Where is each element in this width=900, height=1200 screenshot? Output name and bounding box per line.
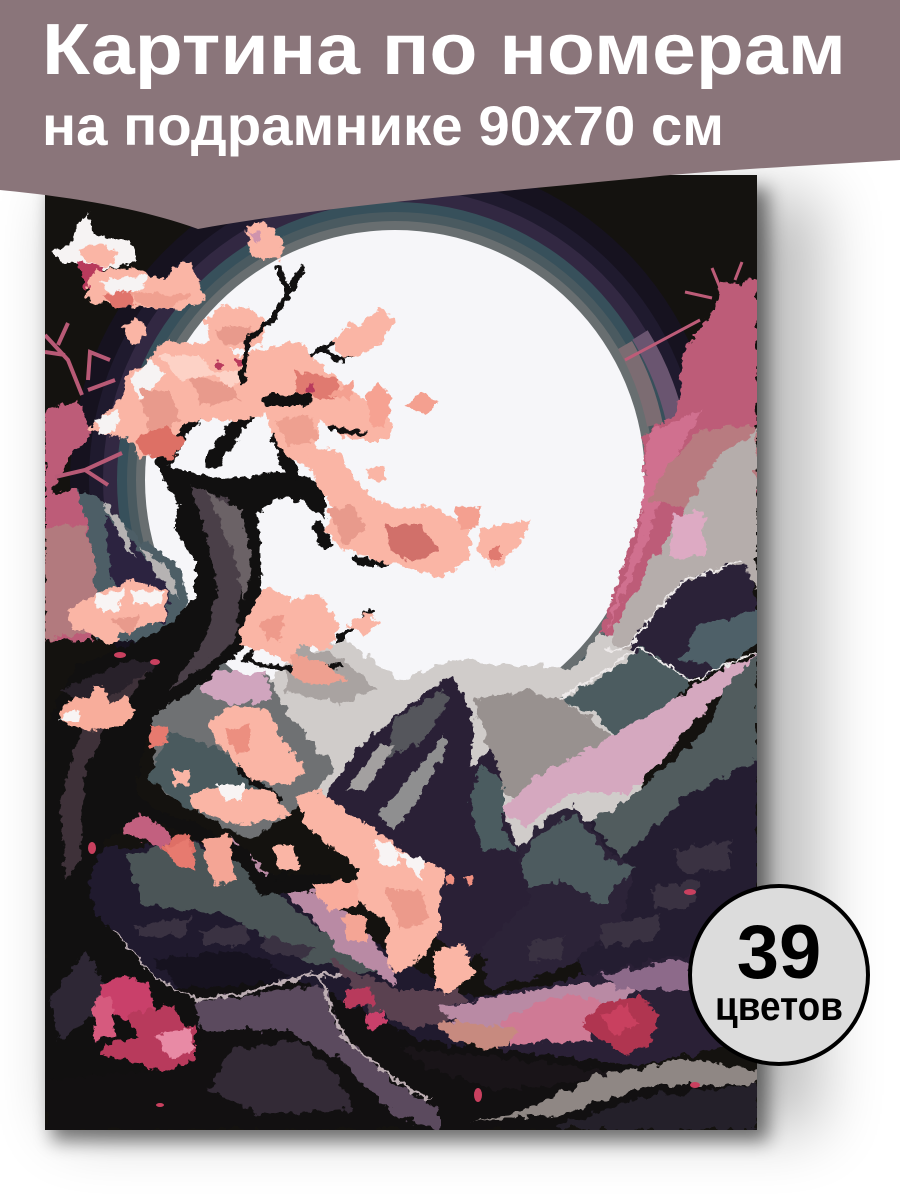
painting: halo around the moon (70, 188, 690, 673)
painting: valley floor (88, 812, 723, 1066)
subtitle: на подрамнике 90х70 см (42, 94, 724, 157)
painting: blossoms upper main cluster (88, 305, 392, 470)
painting: moon (145, 230, 645, 730)
painting: left mountain (78, 490, 190, 640)
painting: small falling petals (88, 652, 700, 1107)
painting: blossoms middle left (68, 580, 168, 645)
painting canvas (45, 155, 757, 1130)
painting: mist (145, 632, 640, 860)
painting: pink sky right (600, 278, 757, 640)
painting: pink sky left (45, 400, 98, 642)
painting: pink twigs left (45, 323, 122, 485)
banner background (0, 0, 900, 229)
painting: blossoms centre branch (148, 585, 380, 885)
painting: tree trunk and limbs (48, 465, 328, 1042)
painting: central mountain (322, 675, 530, 960)
painting: root highlights (112, 930, 430, 1100)
painting: large lotus blossom (58, 685, 135, 730)
badge: 39 colours (690, 886, 868, 1064)
painting: valley mottling (135, 840, 730, 962)
painting: foreground ground (45, 977, 757, 1130)
badge label: цветов (715, 983, 843, 1029)
painting: pink flower bushes (92, 975, 660, 1072)
painting: cloud and right ridges (470, 430, 757, 1000)
painting: upper branch over blossoms (242, 268, 365, 434)
canvas shadow (52, 188, 820, 1141)
title: Картина по номерам (42, 10, 846, 90)
painting: blossoms lower diagonal spray (295, 790, 475, 995)
painting: tree branches (154, 416, 390, 804)
badge number: 39 (737, 910, 821, 995)
painting: pink twigs right (625, 262, 742, 360)
painting: blossoms right spray on moon (330, 305, 438, 425)
painting: blossoms lower right spray (305, 447, 530, 578)
painting: night sky (45, 175, 757, 1130)
painting: cloud highlights (560, 561, 757, 699)
painting: blossoms top-left spray (50, 212, 285, 310)
